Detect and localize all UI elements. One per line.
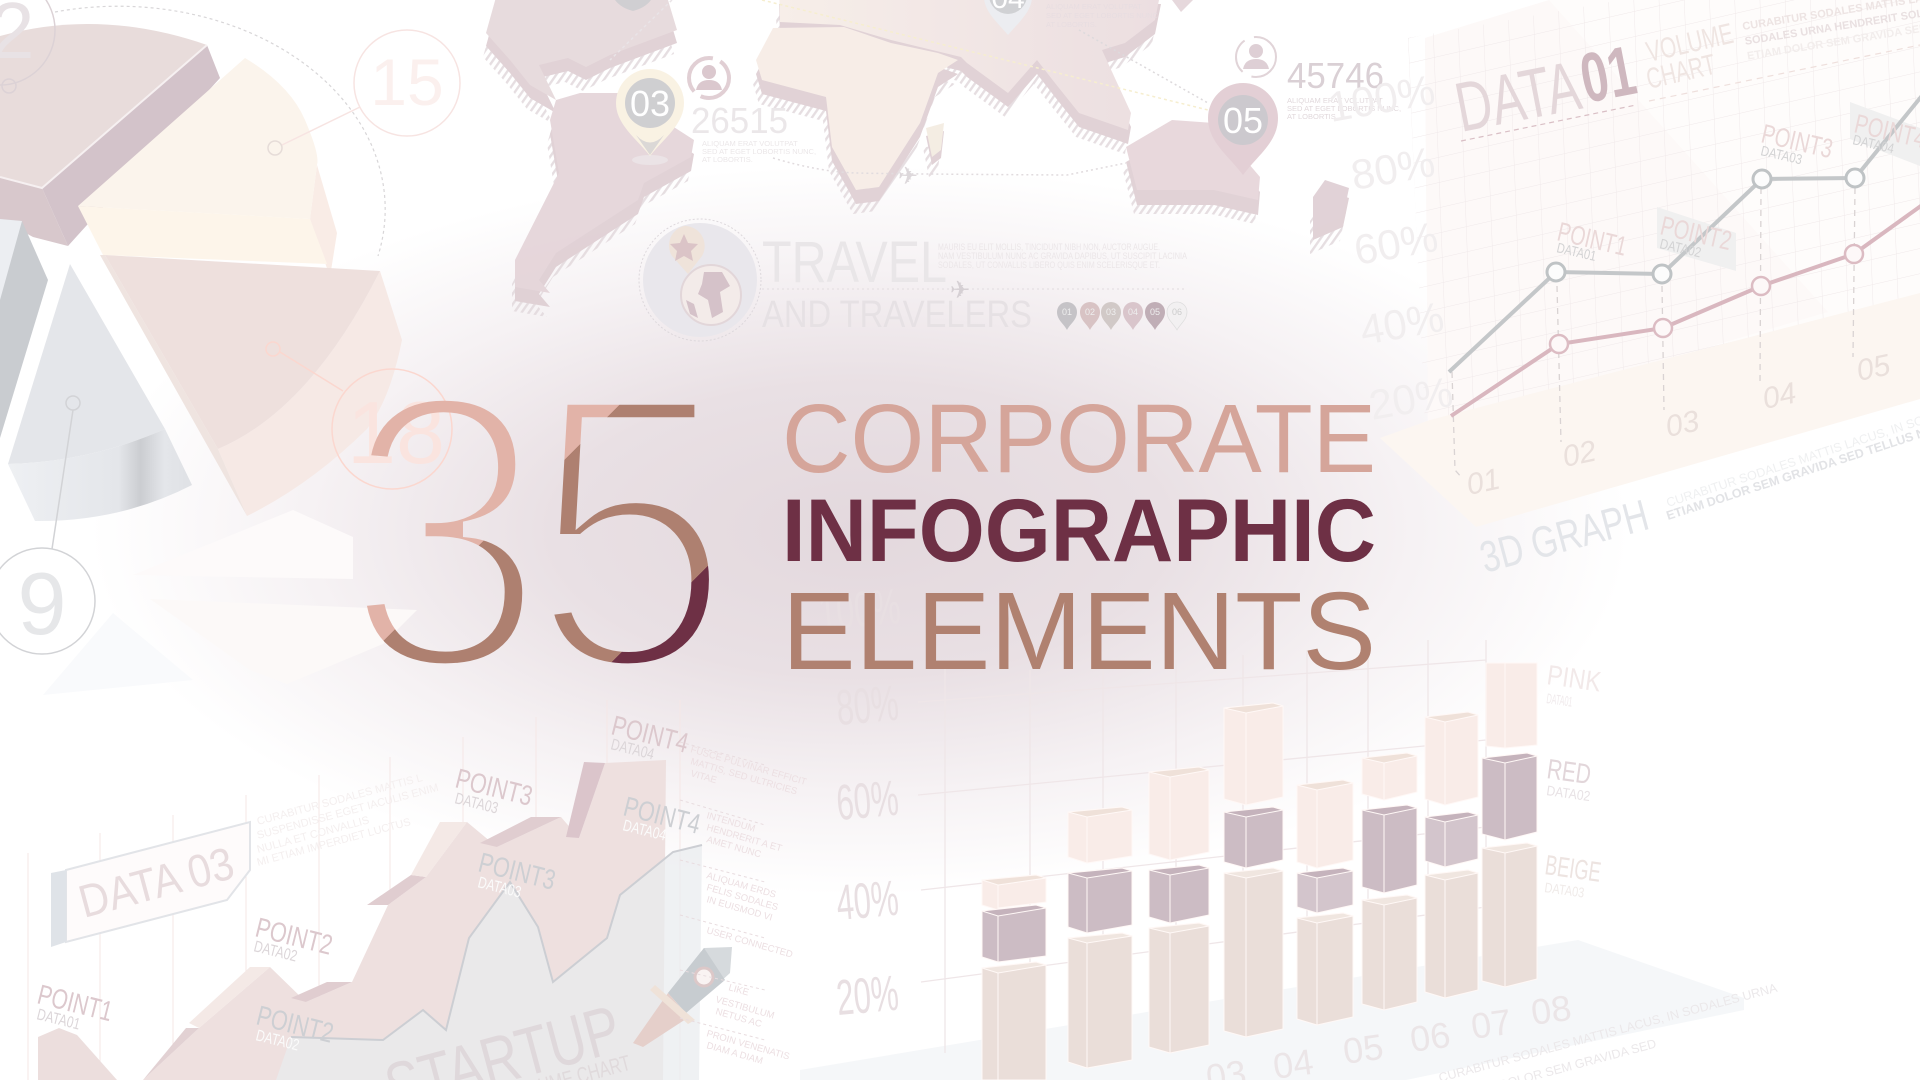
callout: 18 [266,342,452,489]
area series: grey [276,845,702,1080]
box: data 03 [51,822,250,947]
callout: 9: 9 [18,554,66,653]
text: pin 04 caption: AT LOBORTIS. [1046,20,1097,29]
stat: 45746: ALIQUAM ERAT VOLUTPAT [1287,96,1383,105]
mini pins row: 05 [1150,307,1160,317]
point labels: pink series: DATA01 [35,1006,82,1034]
side notes: USER CONNECTED [705,925,794,961]
title line: infographic: INFOGRAPHIC [782,480,1376,580]
stat: 26515: 26515 [691,100,788,141]
point labels: POINT2 [1658,211,1735,256]
pie slice: grey [0,219,192,521]
text: travel paragraph: SODALES, UT CONVALLIS LIBERO QUIS ENIM SCELERISQUE ET. [938,260,1160,271]
text: pin 04 caption: SED AT EGET LOBORTIS NUNC [1046,11,1159,20]
callout: 18: 18 [347,383,445,482]
percent axis labels: 60% [1350,213,1441,274]
area series: pink [38,760,666,1080]
side notes: INTENDUM [705,810,756,835]
heading: volume chart [1643,18,1736,96]
percent labels: 40% [834,870,901,931]
shadow shapes [43,510,417,695]
bar column 7 [1425,712,1478,998]
point labels: DATA01 [1555,239,1598,264]
title line: corporate: CORPORATE [782,384,1376,493]
point labels: grey series: DATA03 [476,874,523,902]
pin: 05: 05 [1223,100,1263,141]
callout: 9 [0,396,95,654]
point labels: DATA04 [1851,131,1896,156]
panel: travel and travelers [639,219,1188,341]
title line: elements: ELEMENTS [782,570,1376,693]
graph back plane [1408,0,1920,450]
percent labels: 20% [834,965,901,1026]
percent axis labels [1324,66,1456,429]
side notes: PROIN VENENATIS [705,1028,791,1063]
stat: 45746: AT LOBORTIS. [1287,112,1338,121]
point labels: grey series: DATA04 [621,817,668,845]
side notes: FUSCE PULVINAR EFFICIT [689,744,808,788]
callout: 15 [268,30,460,155]
side notes: VITAE [689,768,718,786]
icon: rocket [633,947,732,1047]
mini pins row: 03 [1106,307,1116,317]
pin: 03: 03 [630,83,670,124]
x axis labels: 05 [1340,1026,1386,1072]
legend [1543,659,1603,901]
x axis labels: 07 [1468,1001,1514,1047]
mini pins row: 06 [1172,307,1182,317]
text: travel paragraph: MAURIS EU ELIT MOLLIS, TINCIDUNT NIBH NON, AUCTOR AUGUE. [938,242,1160,253]
panel: 3D pie chart [0,0,460,695]
percent labels: 60% [834,770,901,831]
point labels: pink series: POINT4 [609,710,692,759]
mini pins row: 04 [1128,307,1138,317]
legend: BEIGE [1543,849,1603,888]
legend: DATA01 [1546,690,1574,710]
point labels: grey series: POINT3 [476,847,559,896]
point labels: grey series: POINT4 [621,791,704,840]
side notes: DIAM A DIAM [705,1040,764,1067]
point labels: pink series: POINT1 [35,979,116,1027]
callout: 2 [0,0,55,93]
axis labels: 03 [1663,405,1702,444]
text: travel paragraph: NAM VESTIBULUM NUNC AC GRAVIDA DAPIBUS, UT SUSCIPIT LACINIA [938,251,1188,262]
bar column 1 [982,875,1046,1080]
side notes: IN EUISMOD VI [705,894,774,924]
panel: 3D line graph [1324,0,1920,583]
side notes [680,742,808,1067]
point labels: POINT1 [1555,217,1630,262]
text: pin 04 caption: ALIQUAM ERAT VOLUTPAT [1046,2,1142,11]
dotted route [762,288,1185,290]
stat: 45746: 45746 [1287,55,1384,96]
percent axis labels: 20% [1365,368,1456,429]
point labels [1555,109,1920,264]
point labels: pink series: DATA02 [252,938,299,966]
panel: startup area chart [28,700,808,1080]
heading: data 01: 01 [1574,31,1642,118]
side notes: MATTIS, SED ULTRICIES [689,756,798,797]
chart floor [800,940,1744,1080]
x axis labels [1203,987,1574,1080]
stat: 26515 [689,58,816,164]
side notes: VESTIBULUM [714,994,776,1022]
stat: 45746 [1236,37,1401,121]
text: data 03 paragraph: CURABITUR SODALES MATTIS L [256,772,424,828]
bar column 4 [1224,703,1283,1037]
x axis labels: 08 [1528,987,1574,1033]
bar column 6 [1362,753,1417,1010]
map continent sides [486,3,1349,307]
heading: 3D graph: 3D GRAPH [1475,491,1654,583]
line series: grey [1449,92,1920,372]
text: data 03 paragraph: SUSPENDISSE EGET IACULIS ENIM [256,782,440,842]
legend: DATA02 [1546,782,1592,804]
pin: 04 [984,0,1032,35]
text: pin 04 caption [1046,2,1159,29]
point labels: grey series: DATA02 [254,1027,301,1055]
map continents [486,0,1349,293]
stat: 26515: SED AT EGET LOBORTIS NUNC, [702,147,816,156]
vertical guide lines [28,700,680,1080]
callout: 15: 15 [370,45,444,119]
bar column 3 [1149,767,1209,1053]
stat: 26515: ALIQUAM ERAT VOLUTPAT [702,139,798,148]
stat: 26515: AT LOBORTIS. [702,155,753,164]
point labels: DATA02 [1658,235,1703,260]
point labels: POINT3 [1759,119,1836,164]
heading: volume chart: CHART [1643,49,1719,96]
percent axis labels: 80% [1347,138,1438,199]
mini pins row [1057,302,1187,330]
flight paths [610,0,1208,175]
icon: travel badge [639,219,761,341]
x axis labels: 06 [1407,1014,1453,1060]
dashed drop lines [1452,188,1855,478]
stat: 45746: SED AT EGET LOBORTIS NUNC, [1287,104,1401,113]
bar column 8 [1482,663,1537,987]
axis labels: 01 [1464,463,1503,502]
big number 3: 3 [344,310,546,752]
side notes: AMET NUNC [705,834,762,860]
dashed orbit [55,6,385,256]
pie slice: mauve [0,24,220,246]
bar column 5 [1297,780,1353,1025]
legend: PINK [1545,659,1603,697]
pie slice: pink [100,255,402,516]
heading: volume chart: VOLUME [1643,18,1736,69]
percent axis labels: 100% [1324,66,1438,131]
axis labels: 04 [1760,377,1799,416]
heading: data 01 [1449,31,1920,147]
point labels: pink series: POINT3 [453,763,536,812]
point labels: pink series [35,710,692,1034]
percent axis labels: 40% [1356,293,1447,354]
point labels: pink series: DATA03 [453,790,500,818]
graph floor [1380,293,1920,527]
pie slice: cream [78,58,337,277]
point labels: grey series: POINT2 [254,1000,337,1049]
title block [366,400,1374,670]
text: data 03 paragraph [256,772,440,869]
mini pins row: 01 [1062,307,1072,317]
heading: travel: TRAVEL [762,230,947,295]
legend: RED [1545,753,1593,790]
point labels: pink series: POINT2 [253,912,336,961]
pin: 03 [616,69,684,165]
box: data 03: DATA 03 [73,837,239,928]
percent labels: 80% [834,675,901,736]
icon: plane on route: ✈ [898,162,918,190]
mini pins row: 02 [1085,307,1095,317]
side notes: HENDRERIT A ET [705,822,783,854]
text: data 03 paragraph: NULLA ET CONVALLIS [256,814,371,856]
percent labels [816,578,903,1026]
chart grid [918,640,1486,1053]
axis labels: 05 [1854,349,1893,388]
text: travel paragraph [938,242,1188,271]
point labels: pink series: DATA04 [609,736,656,764]
big number 5: 5 [530,310,732,752]
heading: data 01: DATA [1449,46,1587,147]
map hatch shadows [483,14,1346,317]
percent labels: 100% [816,578,903,641]
point labels: grey series [254,791,704,1055]
line series: pink [1451,203,1920,416]
side notes: LIKE [727,982,750,999]
icon: person badge right [1236,37,1276,77]
text: data 03 paragraph: MI ETIAM IMPERDIET LUCTUS [256,816,412,869]
axis labels [1464,349,1893,502]
side notes: ALIQUAM ERDS [705,870,777,901]
icon: person badge [689,58,729,98]
panel: world map [483,0,1401,317]
point labels: DATA03 [1759,142,1804,167]
legend: DATA03 [1544,879,1586,901]
icon: plane: ✈ [950,276,970,304]
bar column 2 [1068,807,1132,1068]
pin: 05 [1208,83,1278,175]
axis labels: 02 [1560,435,1599,474]
highlight bands [1657,102,1920,271]
panel: stacked 3D bar chart [800,578,1779,1080]
side notes: NETUS AC [714,1006,763,1030]
heading: and travelers: AND TRAVELERS [762,294,1032,336]
pin: top [615,0,651,11]
side notes: FELIS SODALES [705,882,779,913]
